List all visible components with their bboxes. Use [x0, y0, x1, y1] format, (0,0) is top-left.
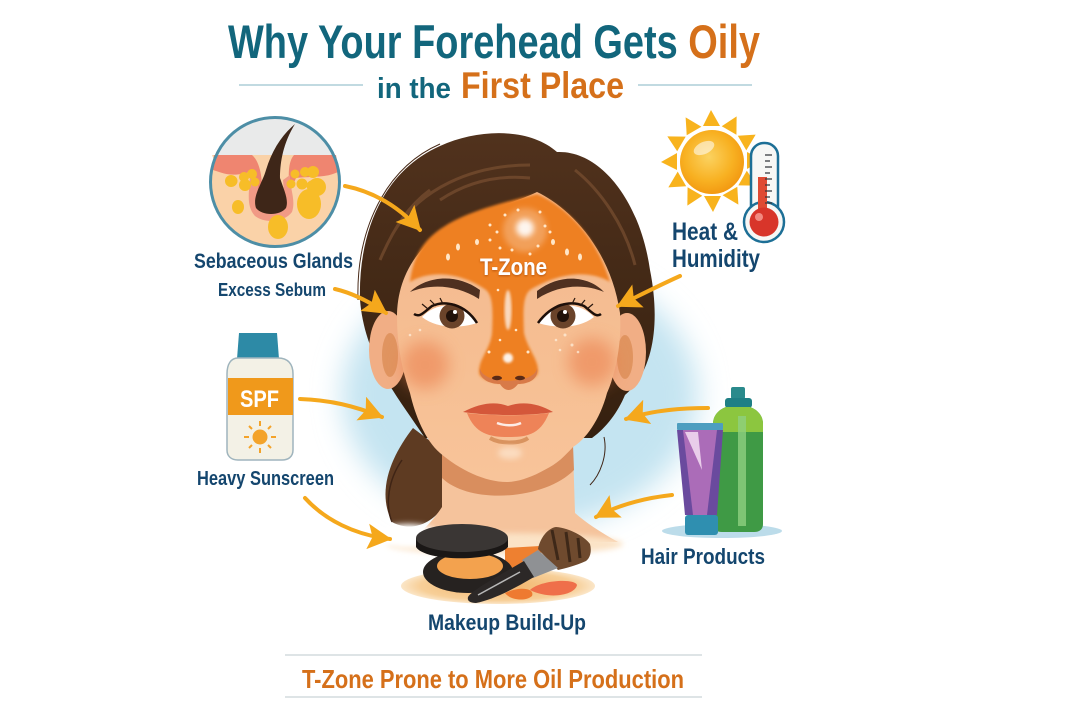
eyebrows: [410, 278, 480, 299]
nose: [480, 368, 537, 390]
cheek blush: [401, 341, 449, 389]
lips: [463, 403, 553, 459]
icon: hair products: [662, 387, 782, 538]
face illustration: [358, 133, 655, 555]
T-zone: [410, 194, 610, 383]
hair strands: [380, 165, 635, 265]
label: heavy sunscreen: Heavy Sunscreen: [197, 468, 334, 490]
jaw shadow: [442, 445, 574, 496]
ponytail: [385, 428, 444, 527]
oil highlights: [409, 208, 582, 363]
label: sebaceous glands: [194, 250, 353, 300]
label: T-Zone: T-Zone: [480, 254, 547, 281]
label: hair products: Hair Products: [641, 544, 765, 569]
eyes: [414, 298, 477, 328]
title: [228, 15, 760, 106]
icon: sebaceous gland: [210, 118, 340, 246]
label: makeup build-up: Makeup Build-Up: [428, 610, 586, 635]
label: sebaceous glands: Sebaceous Glands: [194, 250, 353, 273]
label: heat and humidity: Heat &: [672, 218, 738, 246]
label: sebaceous glands: Excess Sebum: [218, 280, 326, 300]
hair back: [360, 133, 655, 438]
arrows: [300, 186, 708, 539]
background wash: [342, 260, 698, 530]
neck fade: [387, 533, 623, 555]
label: heat and humidity: [672, 218, 760, 273]
footer callout: T-Zone Prone to More Oil Production: [302, 664, 684, 694]
icon: SPF bottle: [227, 333, 293, 460]
neck: [405, 450, 618, 542]
title: Why Your Forehead Gets Oily: [228, 15, 760, 68]
ears: [369, 311, 646, 391]
icon: SPF bottle: SPF: [240, 386, 279, 413]
title: in the: [377, 73, 451, 105]
icon: sun and thermometer: [661, 110, 784, 242]
label: heat and humidity: Humidity: [672, 245, 760, 273]
face shape: [397, 192, 620, 482]
title: First Place: [461, 65, 624, 106]
icon: makeup: [401, 524, 595, 604]
